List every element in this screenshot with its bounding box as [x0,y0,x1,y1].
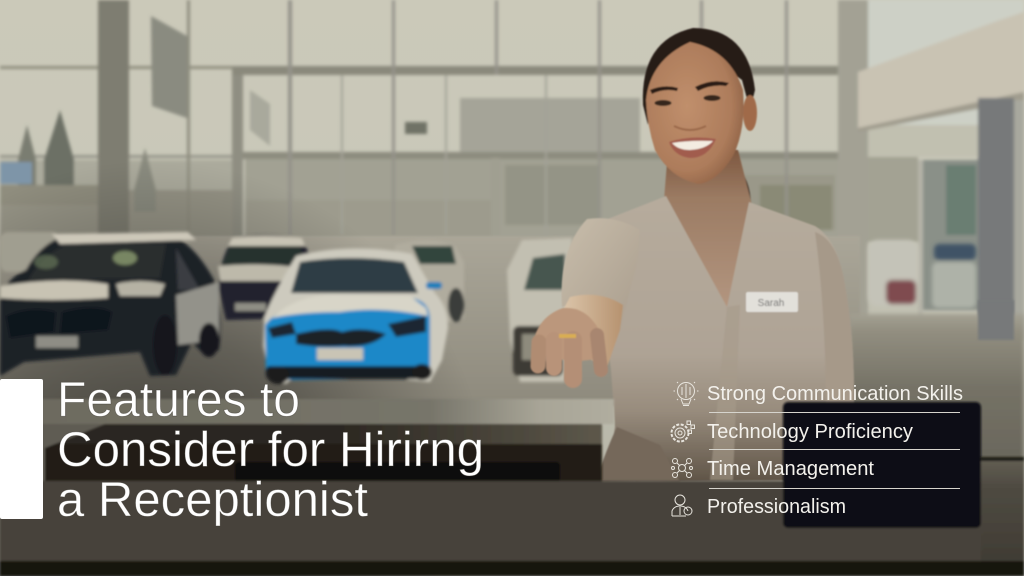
folded cuff [596,427,680,482]
right pillar base [978,300,1014,340]
icon: brain lightbulb [674,382,698,406]
hair [643,28,755,125]
nose [674,126,706,130]
divider [709,488,960,489]
divider [709,449,960,450]
sleeve [562,218,640,328]
monitor [783,402,981,528]
feature list [672,382,963,518]
sky and canopy on the right [868,0,1024,125]
feature: technology proficiency: Technology Proficiency [707,421,913,443]
divider [709,412,960,413]
icon: gears [672,421,694,442]
title: Consider for Hirirng [57,423,484,477]
car: big dark left [0,232,221,376]
floor [0,236,860,406]
icon: people network [672,458,692,478]
ear [743,95,757,131]
face [646,42,744,184]
car: back right silver [395,240,464,322]
title: Features to [57,373,300,427]
ring [559,334,576,338]
desk foreground [0,399,1024,576]
eyes and brows [650,86,678,94]
receptionist figure [532,28,854,482]
car: back centre dark [218,235,318,320]
mullions [0,66,240,69]
blouse torso [570,196,854,482]
ponytail [737,165,751,204]
title [57,373,484,527]
feature: professionalism: Professionalism [707,496,846,518]
title: a Receptionist [57,473,368,527]
name badge [746,292,798,312]
placket and right sleeve shading [710,305,740,480]
smile [669,138,716,158]
right side cars [868,240,976,308]
car: white, behind the hand [507,238,572,382]
skyline sign [405,122,427,134]
white accent block [0,379,43,519]
feature: time management: Time Management [707,458,874,480]
neck and chest [664,150,752,310]
icon: professional with badge [672,495,692,516]
distant trees [44,110,74,185]
name badge: Sarah [758,298,784,309]
hand [532,308,606,379]
floor shade [0,160,620,576]
lower interior tones [0,160,235,240]
feature: strong communication skills: Strong Communication Skills [707,383,963,405]
car: blue hero [263,248,448,384]
forearm [562,295,623,370]
background cars [0,232,572,384]
